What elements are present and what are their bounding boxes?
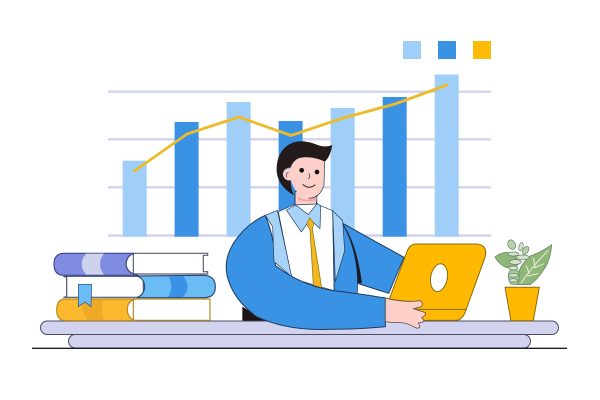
chart: bars and trend line	[108, 74, 491, 237]
top purple book	[54, 253, 208, 275]
pot	[505, 287, 539, 321]
stack of books	[54, 253, 215, 321]
ground line	[32, 347, 567, 349]
small succulent leaves	[506, 239, 517, 251]
neck and face	[291, 157, 325, 215]
collar	[286, 203, 321, 232]
middle blue book	[63, 275, 215, 298]
hand	[385, 298, 426, 328]
hair	[277, 141, 332, 195]
shirt	[278, 204, 334, 291]
large leaf	[517, 245, 552, 285]
potted plant	[495, 239, 552, 321]
table	[40, 321, 558, 348]
bookmark	[78, 284, 92, 307]
laptop	[388, 244, 486, 320]
far arm	[343, 223, 404, 293]
near arm and jacket	[226, 215, 385, 329]
chair	[242, 307, 265, 321]
jacket right side	[333, 213, 358, 294]
stem leaves	[508, 269, 519, 285]
leaves	[495, 239, 552, 285]
bottom orange book	[57, 299, 210, 321]
left leaf	[495, 252, 519, 268]
left lapel	[265, 210, 292, 277]
dark jacket shadow	[343, 225, 362, 283]
tie	[307, 218, 322, 288]
chart legend	[403, 41, 491, 59]
man at laptop	[226, 141, 486, 329]
